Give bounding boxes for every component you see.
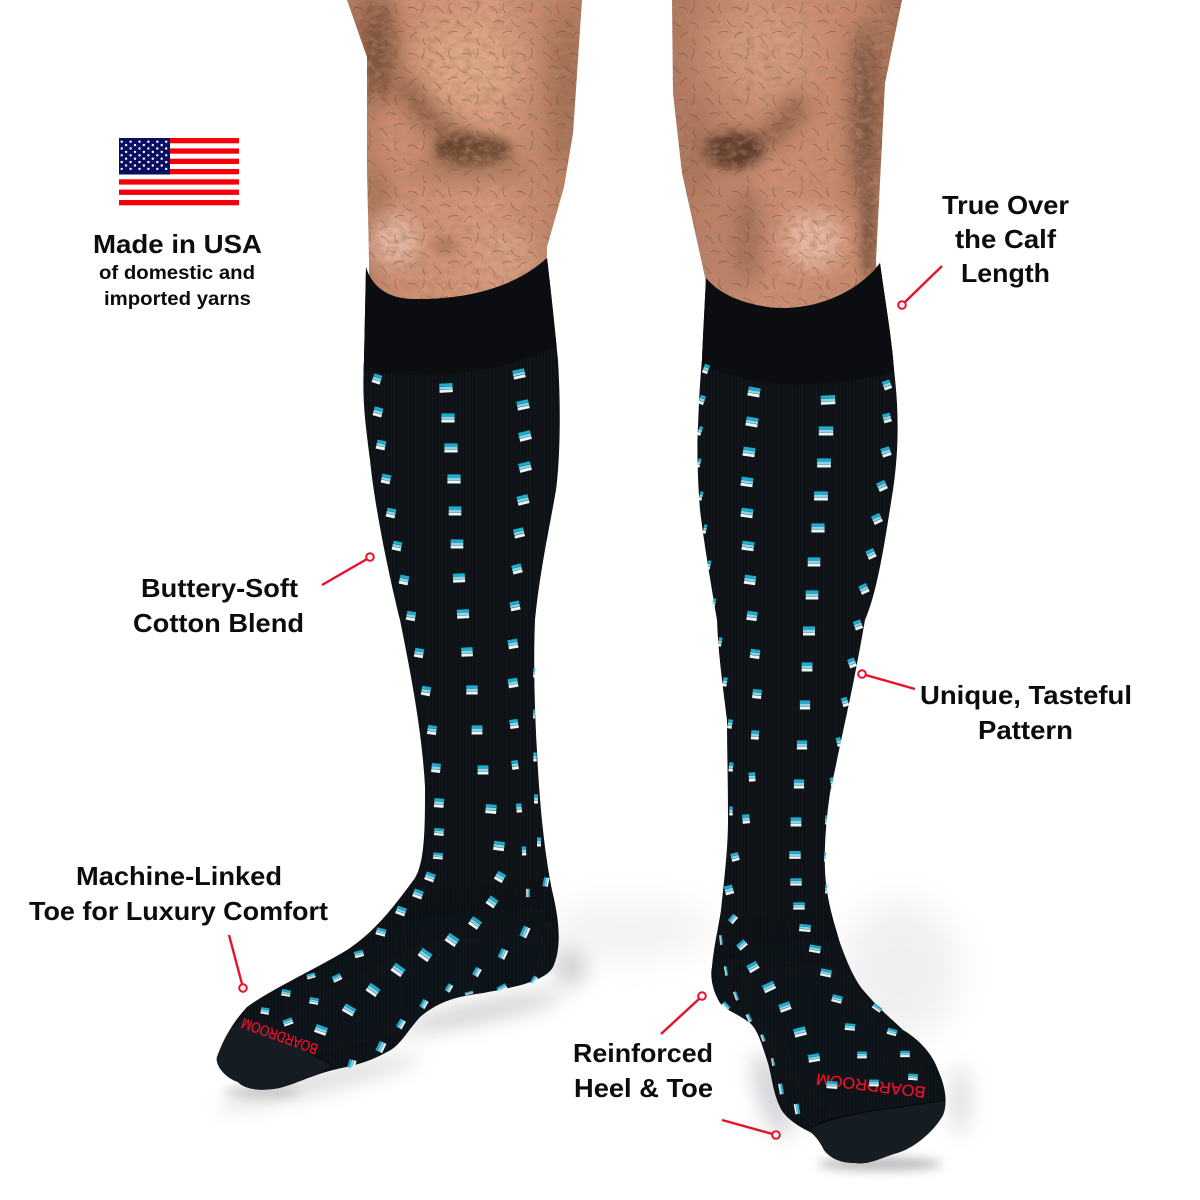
sock pattern: right leg bbox=[696, 364, 892, 910]
sock pattern: right foot bbox=[719, 914, 918, 1114]
callout: pattern: Pattern bbox=[978, 715, 1073, 745]
callout: reinforced heel and toe: Heel & Toe bbox=[574, 1073, 713, 1103]
left sock cuff bbox=[364, 258, 557, 374]
text: Made in USA: of domestic and bbox=[99, 263, 255, 284]
text: Made in USA: Made in USA bbox=[93, 229, 262, 259]
callout: reinforced heel and toe: Reinforced bbox=[573, 1038, 713, 1068]
right sock cuff bbox=[702, 263, 894, 384]
sock pattern: left foot bbox=[260, 871, 549, 1069]
left leg skin bbox=[347, 0, 582, 300]
right sock label: BOARDROOM bbox=[815, 1070, 926, 1100]
callout: machine-linked toe: Toe for Luxury Comfort bbox=[29, 896, 328, 926]
right foot body bbox=[718, 945, 939, 1087]
floor shadows bbox=[216, 900, 970, 1171]
left sock bbox=[216, 258, 560, 1090]
callout: machine-linked toe: Machine-Linked bbox=[76, 861, 282, 891]
left foot body bbox=[230, 926, 559, 1074]
callout: calf length bbox=[898, 190, 1069, 309]
callout: reinforced heel and toe bbox=[573, 992, 780, 1139]
sock pattern: left leg bbox=[372, 368, 541, 860]
left sock label: BOARDROOM bbox=[239, 1014, 320, 1057]
text: Made in USA: imported yarns bbox=[104, 289, 251, 310]
left sock toe bbox=[216, 1018, 330, 1090]
callout: calf length: True Over bbox=[942, 190, 1069, 220]
right leg skin bbox=[672, 0, 902, 308]
right sock toe bbox=[812, 1101, 946, 1164]
callout: cotton blend: Cotton Blend bbox=[133, 608, 304, 638]
callout: calf length: Length bbox=[961, 258, 1050, 288]
callout: calf length: the Calf bbox=[955, 224, 1056, 254]
callout: pattern bbox=[858, 670, 1132, 745]
callout: pattern: Unique, Tasteful bbox=[920, 680, 1132, 710]
icon: US flag bbox=[119, 138, 239, 206]
callout: machine-linked toe bbox=[29, 861, 328, 992]
callout: cotton blend: Buttery-Soft bbox=[141, 573, 298, 603]
text: Made in USA bbox=[93, 229, 262, 310]
callout: cotton blend bbox=[133, 553, 374, 638]
right sock bbox=[697, 263, 946, 1164]
